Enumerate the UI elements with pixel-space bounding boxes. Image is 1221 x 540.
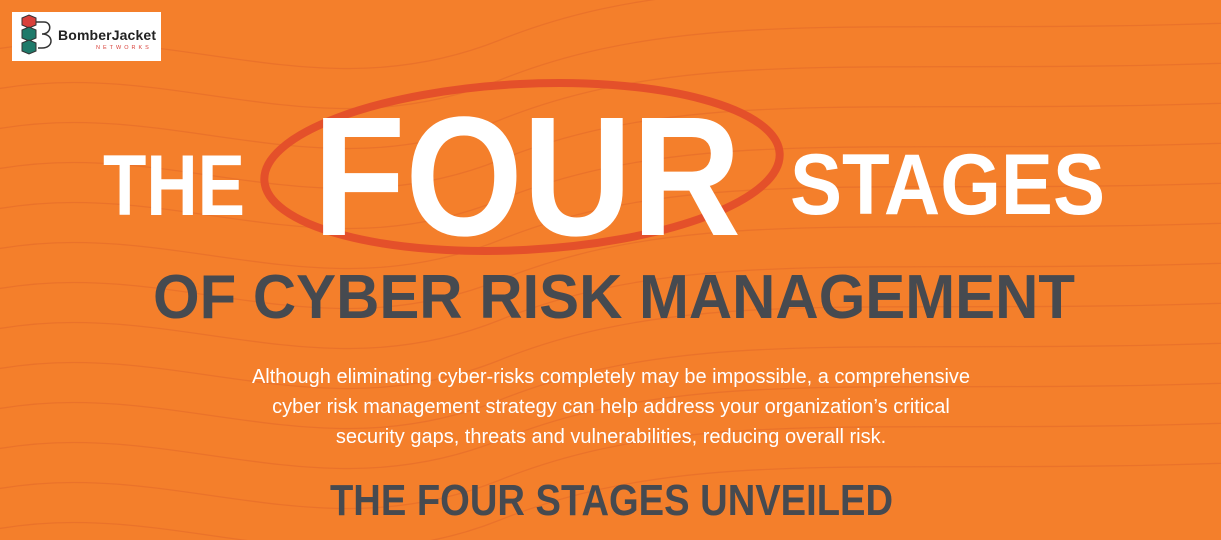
logo	[12, 12, 161, 61]
intro paragraph: cyber risk management strategy can help address your organization’s critical	[272, 396, 950, 418]
title: FOUR	[313, 82, 741, 272]
subtitle: OF CYBER RISK MANAGEMENT	[153, 263, 1075, 332]
icon: stacked hexagons	[22, 15, 51, 54]
title: STAGES	[790, 137, 1105, 233]
intro paragraph: security gaps, threats and vulnerabilities, reducing overall risk.	[336, 426, 886, 448]
logo: NETWORKS	[96, 45, 152, 51]
title: THE	[103, 138, 245, 234]
circle highlight around FOUR	[260, 71, 784, 263]
logo text: BomberJacket	[58, 27, 156, 43]
intro paragraph	[252, 366, 970, 448]
intro paragraph: Although eliminating cyber-risks completely may be impossible, a comprehensive	[252, 366, 970, 388]
section heading: THE FOUR STAGES UNVEILED	[330, 476, 893, 525]
